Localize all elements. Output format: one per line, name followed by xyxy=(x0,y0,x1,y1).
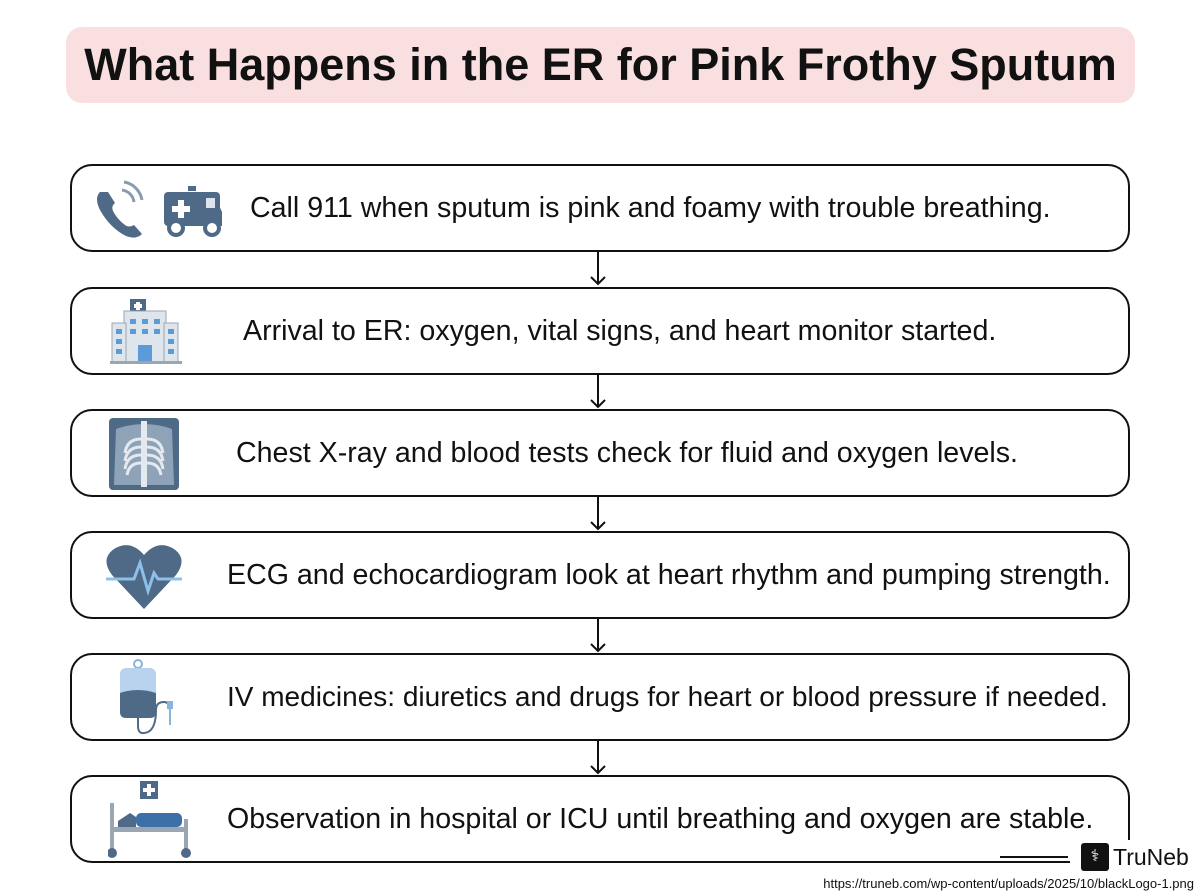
logo: TruNeb xyxy=(1070,840,1200,874)
footer line xyxy=(1000,856,1068,858)
icon: phone and ambulance xyxy=(97,180,222,238)
arrow xyxy=(590,252,606,286)
arrow xyxy=(590,741,606,774)
step 6: observation xyxy=(70,775,1130,863)
icon: hospital bed xyxy=(108,781,191,858)
text: IV medicines: diuretics and drugs for heart or blood pressure if needed. xyxy=(227,681,1108,712)
step 5: IV xyxy=(70,653,1130,741)
icon: hospital xyxy=(110,299,182,364)
logo: TruNeb: TruNeb xyxy=(1113,844,1189,870)
step 2: arrival xyxy=(70,287,1130,375)
arrow xyxy=(590,619,606,652)
title xyxy=(66,27,1135,103)
logo: TruNeb: ⚕ xyxy=(1091,848,1099,865)
source url: https://truneb.com/wp-content/uploads/2025/10/blackLogo-1.png xyxy=(823,876,1194,891)
text: Call 911 when sputum is pink and foamy with trouble breathing. xyxy=(250,192,1051,224)
icon: IV bag xyxy=(120,659,173,734)
icon: chest x-ray xyxy=(109,418,179,490)
icon: heart with pulse xyxy=(106,545,182,609)
arrow xyxy=(590,375,606,408)
text: Arrival to ER: oxygen, vital signs, and heart monitor started. xyxy=(243,315,996,347)
text: Chest X-ray and blood tests check for fluid and oxygen levels. xyxy=(236,437,1018,469)
title: What Happens in the ER for Pink Frothy Sputum xyxy=(84,39,1117,90)
step 3: x-ray xyxy=(70,409,1130,497)
text: ECG and echocardiogram look at heart rhythm and pumping strength. xyxy=(227,559,1111,591)
arrow xyxy=(590,497,606,530)
text: Observation in hospital or ICU until breathing and oxygen are stable. xyxy=(227,803,1093,835)
step 1: call 911 xyxy=(70,164,1130,252)
step 4: ECG xyxy=(70,531,1130,619)
